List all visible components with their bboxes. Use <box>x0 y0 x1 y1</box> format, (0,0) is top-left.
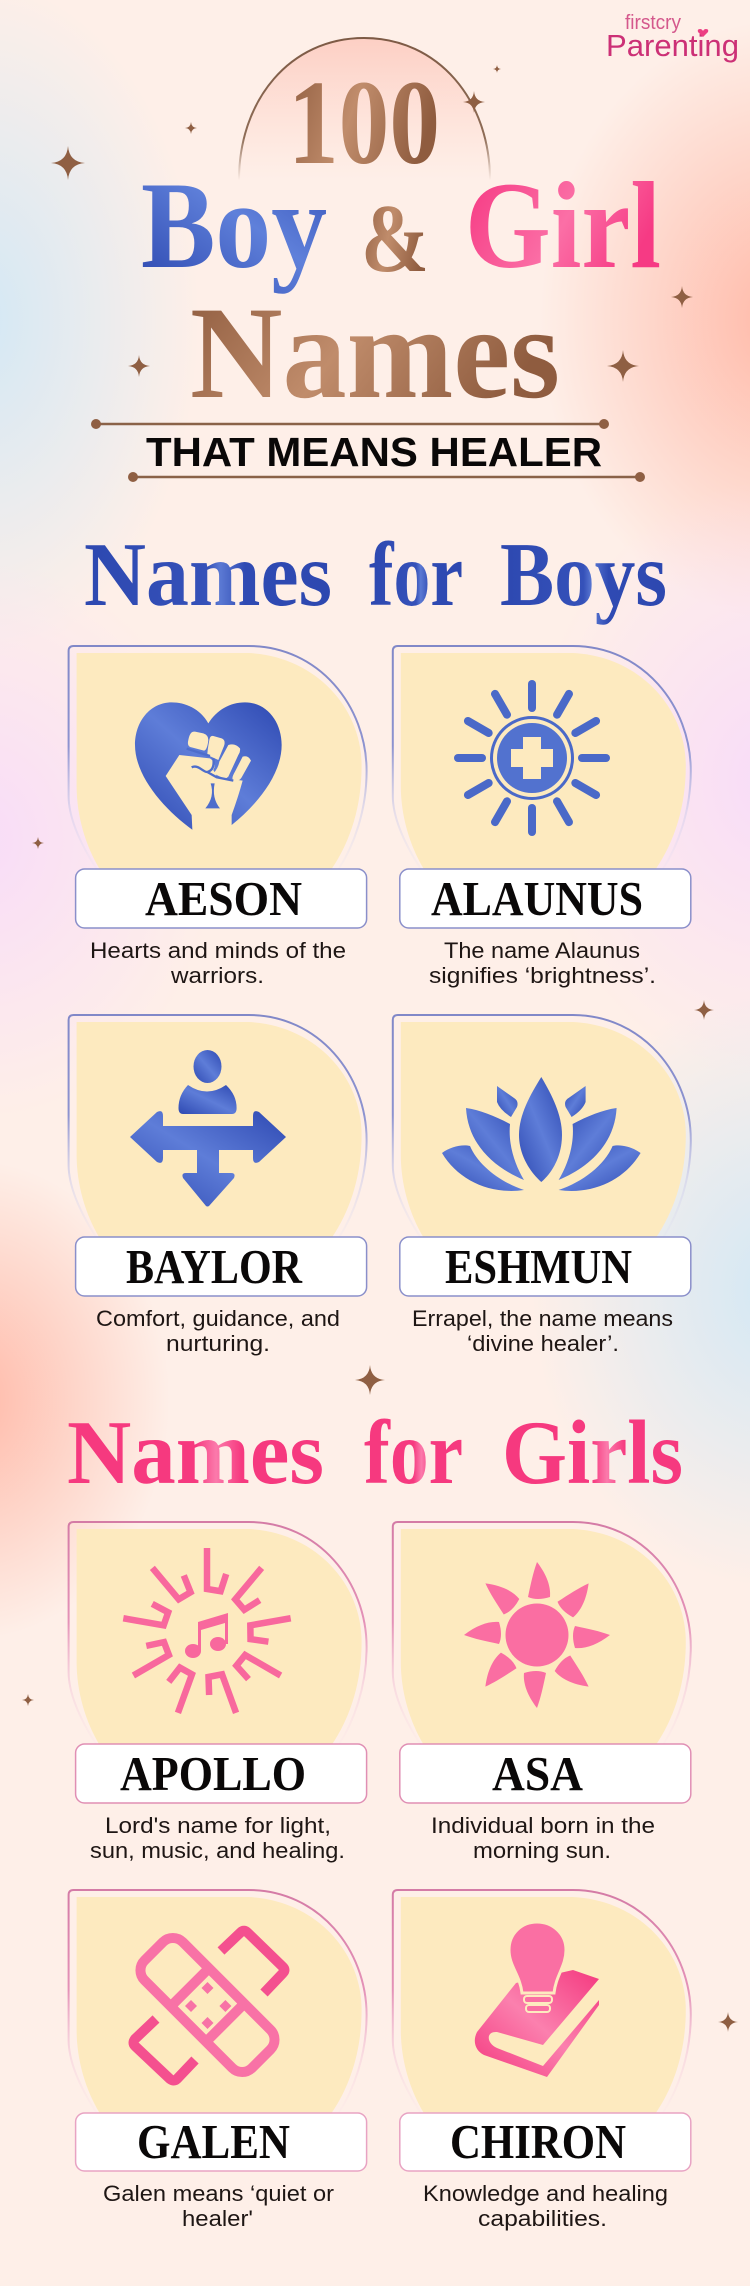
name: AESON <box>145 871 302 926</box>
description: Hearts and minds of the <box>90 938 346 963</box>
card: ESHMUN <box>393 1015 691 1356</box>
title <box>141 56 661 426</box>
description <box>90 1813 345 1863</box>
name: APOLLO <box>120 1746 306 1801</box>
description: nurturing. <box>166 1331 270 1356</box>
card: AESON <box>69 646 367 988</box>
heading: Names for Boys: for <box>369 524 463 625</box>
description: warriors. <box>170 963 264 988</box>
card: ASA <box>393 1522 691 1863</box>
description <box>103 2181 334 2231</box>
card: CHIRON <box>393 1890 691 2231</box>
description: sun, music, and healing. <box>90 1838 345 1863</box>
icon: sun <box>464 1562 610 1708</box>
description <box>429 938 656 988</box>
title: Names <box>190 279 560 426</box>
name: BAYLOR <box>126 1239 303 1294</box>
heading: Names for Boys: Names <box>84 524 332 625</box>
heading: Names for Girls <box>67 1402 683 1503</box>
description <box>412 1306 673 1356</box>
description: signifies ‘brightness’. <box>429 963 656 988</box>
description: Knowledge and healing <box>423 2181 668 2206</box>
icon: sun with medical cross <box>454 680 610 836</box>
card: BAYLOR <box>69 1015 367 1356</box>
description: ‘divine healer’. <box>467 1331 619 1356</box>
title: Boy <box>141 157 327 294</box>
heading: Names for Girls: Girls <box>502 1402 683 1503</box>
description: The name Alaunus <box>444 938 640 963</box>
title: Girl <box>465 157 661 294</box>
description: Lord's name for light, <box>105 1813 331 1838</box>
description: Galen means ‘quiet or <box>103 2181 334 2206</box>
description: Comfort, guidance, and <box>96 1306 340 1331</box>
description: capabilities. <box>478 2206 607 2231</box>
description <box>423 2181 668 2231</box>
title: & <box>361 185 429 293</box>
title: 100 <box>288 56 440 190</box>
heading: Names for Boys: Boys <box>500 524 667 625</box>
name: ESHMUN <box>445 1239 632 1294</box>
description <box>96 1306 340 1356</box>
heading: Names for Boys <box>84 524 667 625</box>
description: Errapel, the name means <box>412 1306 673 1331</box>
heading: Names for Girls: for <box>364 1402 463 1503</box>
icon: crossed bandages <box>134 1931 284 2080</box>
logo: FirstCry Parenting: firstcry <box>625 12 681 34</box>
description: morning sun. <box>473 1838 611 1863</box>
description <box>90 938 346 988</box>
description: Individual born in the <box>431 1813 655 1838</box>
icon: light bulb on book <box>475 1922 599 2077</box>
heading: Names for Girls: Names <box>67 1402 324 1503</box>
decorative arch behind 100 <box>239 38 490 180</box>
description: healer' <box>182 2206 253 2231</box>
icon: lotus <box>442 1077 641 1191</box>
card: GALEN <box>69 1890 367 2231</box>
icon: person at crossroads arrows <box>130 1050 286 1206</box>
name: GALEN <box>137 2114 290 2169</box>
description <box>431 1813 655 1863</box>
name: ALAUNUS <box>431 871 643 926</box>
icon: sun rays with music note <box>123 1548 294 1719</box>
logo: FirstCry Parenting: Parenting <box>606 28 739 63</box>
subtitle with rules <box>91 419 645 482</box>
card: APOLLO <box>69 1522 367 1863</box>
logo: FirstCry Parenting <box>606 12 739 63</box>
name: ASA <box>492 1746 584 1801</box>
subtitle with rules: THAT MEANS HEALER <box>146 429 602 475</box>
card: ALAUNUS <box>393 646 691 988</box>
name: CHIRON <box>450 2114 626 2169</box>
icon: heart with raised fist <box>135 702 282 837</box>
